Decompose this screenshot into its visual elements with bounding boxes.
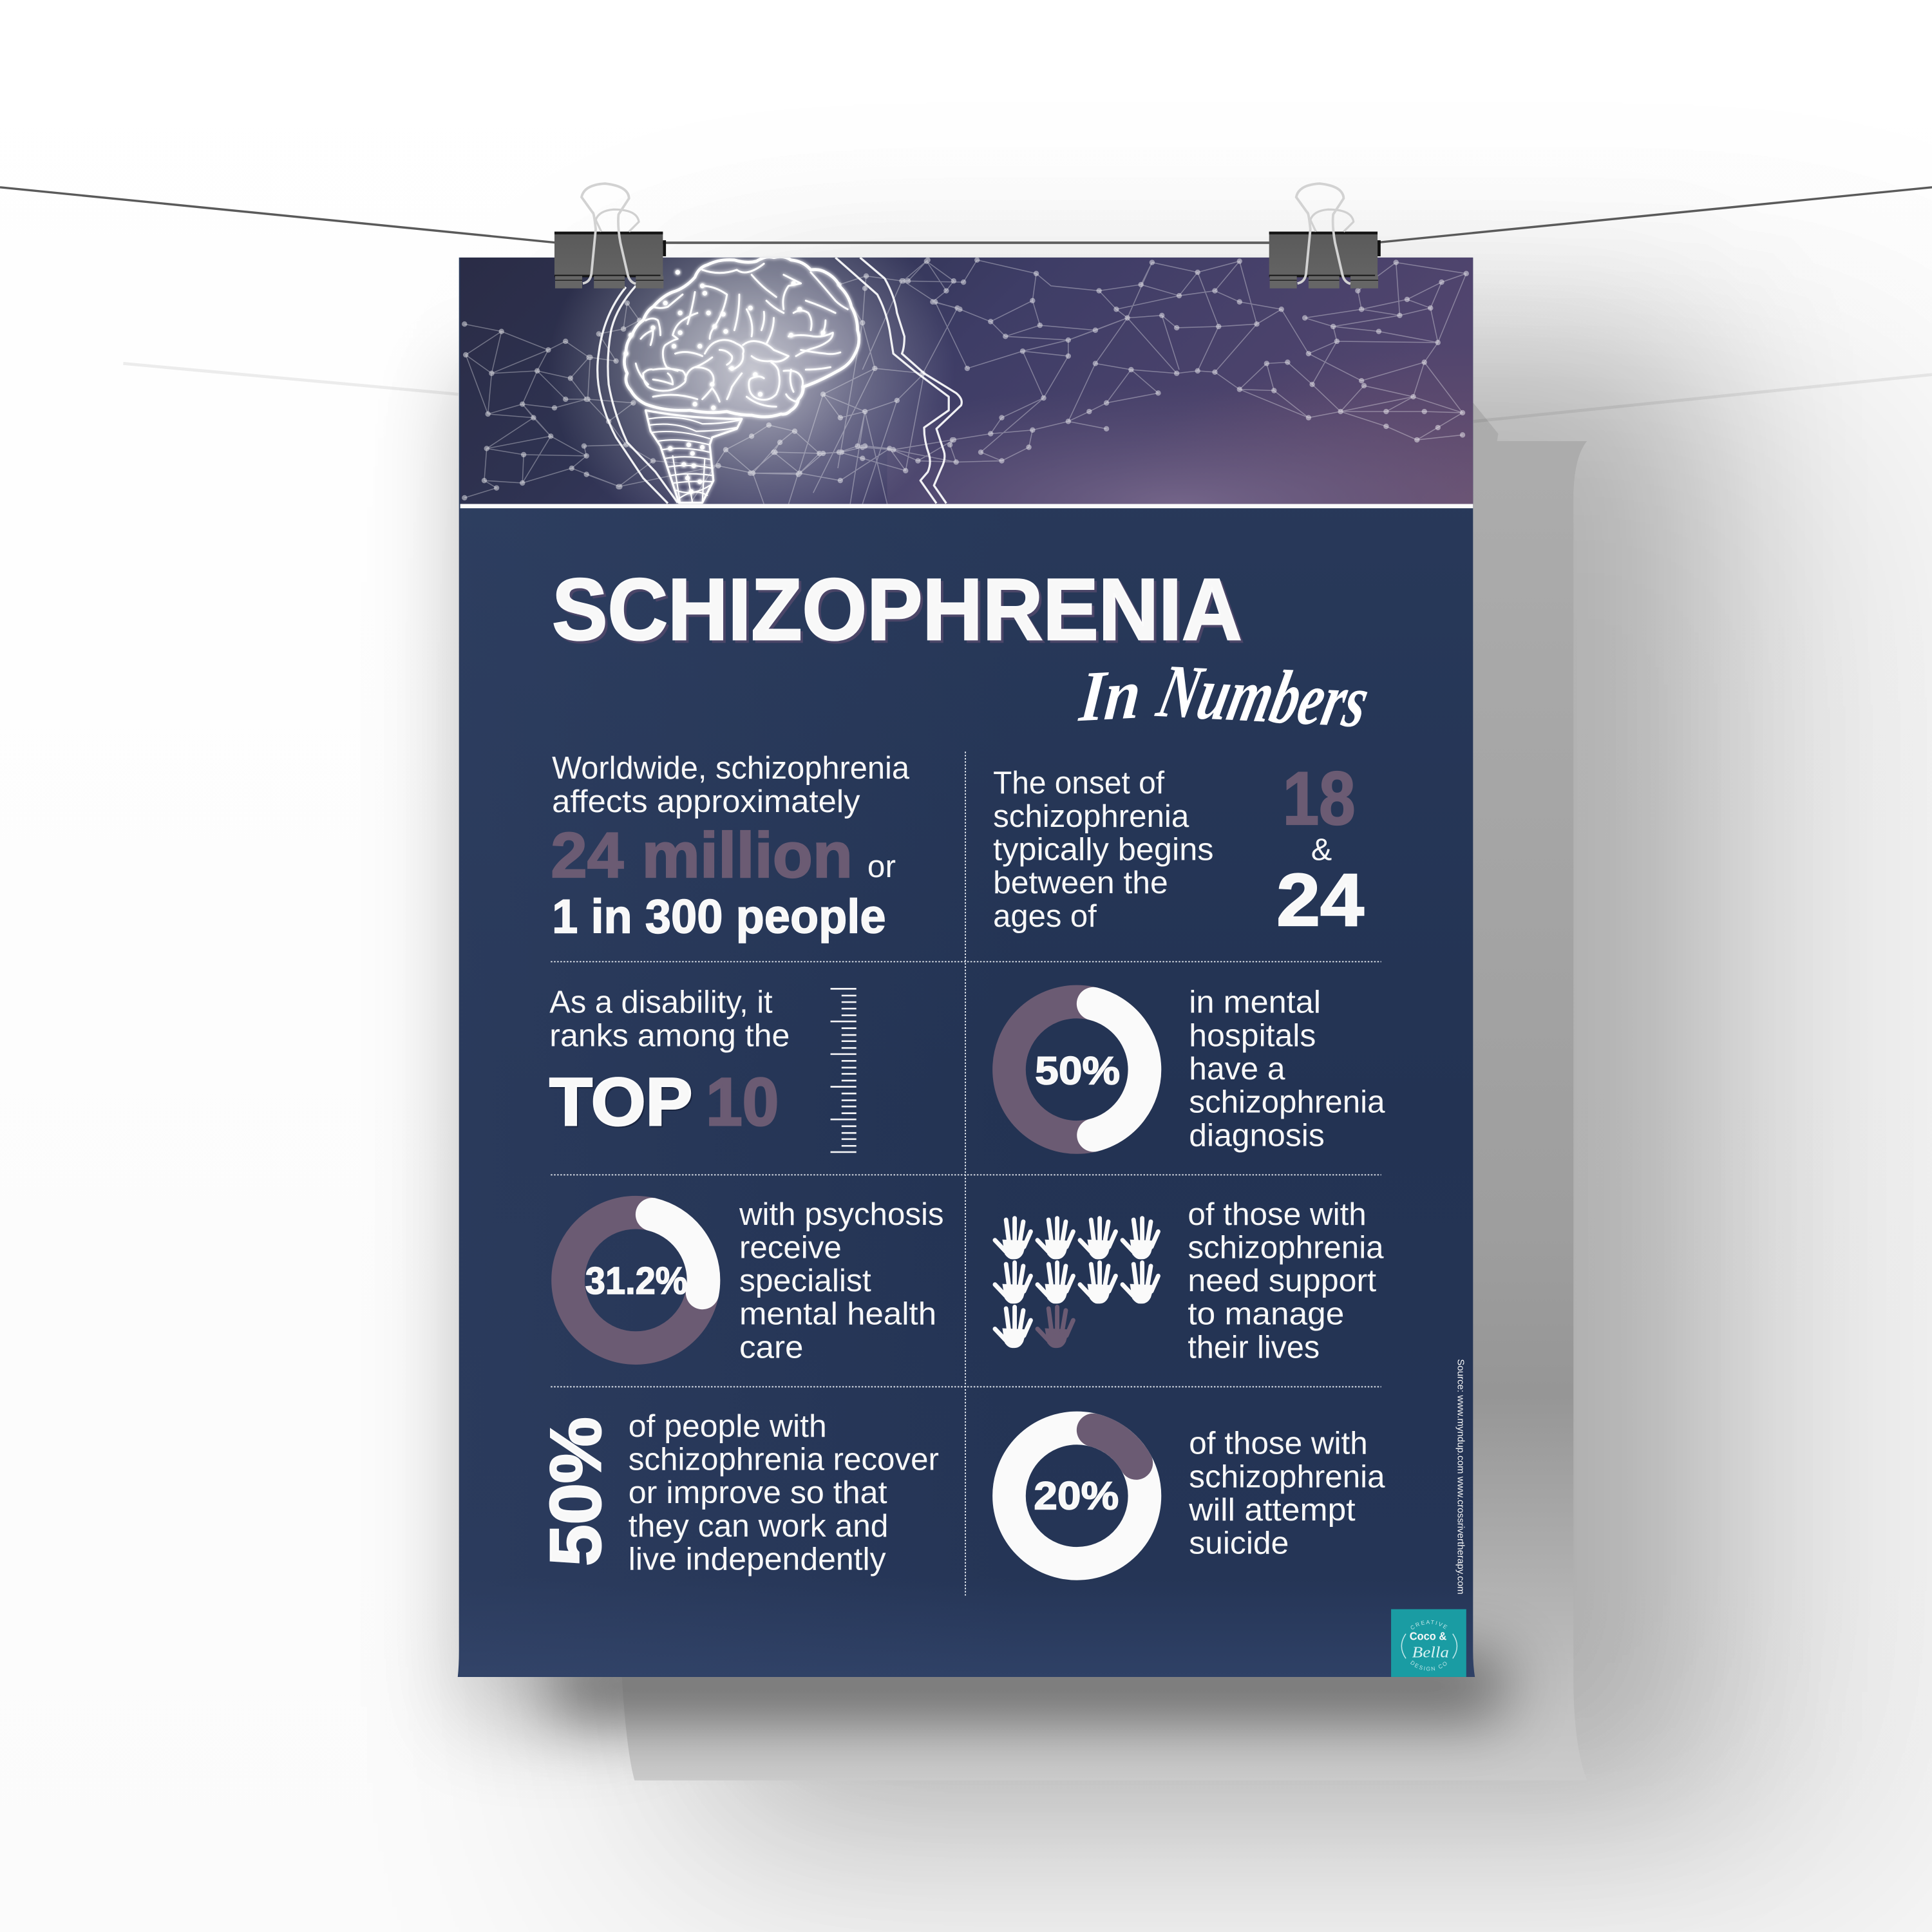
stat: onset ages xyxy=(993,756,1364,942)
stat: top 10 disability xyxy=(549,985,857,1152)
stat: top 10 disability: TOP xyxy=(549,1065,692,1140)
logo badge: CREATIVE xyxy=(1410,1620,1448,1629)
stat: 24 million: affects approximately xyxy=(552,784,860,819)
contact shadow under poster xyxy=(554,1657,1503,1716)
hand icons xyxy=(995,1218,1158,1348)
donut 50 percent xyxy=(1009,1001,1144,1137)
stat: 24 million: Worldwide, schizophrenia xyxy=(552,751,910,786)
stat: 50% recover: or improve so that xyxy=(629,1475,887,1510)
stat: 31.2% specialist care: care xyxy=(739,1330,803,1365)
stat: 50% in mental hospitals: have a xyxy=(1189,1052,1285,1086)
donut 20 percent xyxy=(1009,1428,1144,1564)
stat: 31.2% specialist care xyxy=(568,1197,944,1365)
stat: 20% attempt suicide: suicide xyxy=(1189,1526,1289,1561)
cast shadow of poster xyxy=(621,394,1587,1781)
banner lower right tint xyxy=(1109,345,1473,504)
stat: top 10 disability: As a disability, it xyxy=(549,985,773,1020)
brain fill xyxy=(626,258,858,415)
stat: 9 in 10 need support xyxy=(995,1197,1384,1365)
stat: 50% in mental hospitals: diagnosis xyxy=(1189,1118,1325,1153)
hanging wire xyxy=(0,187,1932,243)
hanging wire shadows xyxy=(123,363,1932,421)
stat: 50% recover: live independently xyxy=(629,1542,886,1577)
subtitle script: In xyxy=(1075,654,1144,737)
stat: 50% in mental hospitals: schizophrenia xyxy=(1189,1085,1385,1120)
stat: 50% in mental hospitals: 50% xyxy=(1035,1049,1120,1093)
stat: 24 million xyxy=(551,751,910,943)
stat: 50% recover: of people with xyxy=(629,1409,827,1444)
stat: onset ages: & xyxy=(1311,833,1332,867)
banner background xyxy=(460,258,1473,504)
title: SCHIZOPHRENIA xyxy=(552,560,1242,658)
banner with brain and network xyxy=(460,258,1473,504)
donut 31.2 percent xyxy=(568,1213,703,1348)
stat: 31.2% specialist care: 31.2% xyxy=(585,1259,688,1302)
stat: onset ages: ages of xyxy=(993,899,1097,934)
network lines xyxy=(464,260,1466,504)
logo badge: Coco & xyxy=(1410,1630,1446,1643)
stat: onset ages: typically begins xyxy=(993,832,1214,867)
stat: 50% in mental hospitals: in mental xyxy=(1189,985,1321,1020)
stat: 20% attempt suicide: of those with xyxy=(1189,1426,1368,1461)
white banner strip xyxy=(460,504,1473,508)
ruler icon xyxy=(831,989,857,1152)
stat: 31.2% specialist care: mental health xyxy=(739,1297,936,1332)
stat: onset ages: The onset of xyxy=(993,766,1164,800)
stat: 50% recover: they can work and xyxy=(629,1509,888,1544)
source note: Source: www.myndup.com www.crossrivertherapy.com xyxy=(1455,1359,1465,1595)
stat: top 10 disability: 10 xyxy=(706,1065,779,1140)
network nodes xyxy=(464,260,1466,498)
stat: onset ages: schizophrenia xyxy=(993,799,1189,834)
stat: 9 in 10 need support: their lives xyxy=(1188,1330,1320,1365)
stat: 50% in mental hospitals: hospitals xyxy=(1189,1018,1316,1053)
stat: 50% recover: schizophrenia recover xyxy=(629,1443,939,1477)
stat: 31.2% specialist care: specialist xyxy=(739,1264,871,1298)
stat: 20% attempt suicide xyxy=(1009,1426,1385,1564)
stat: 24 million: or xyxy=(867,849,896,884)
stat: 31.2% specialist care: receive xyxy=(739,1230,842,1265)
banner purple haze xyxy=(887,345,1473,504)
binder clip left xyxy=(554,184,666,289)
head profile outline xyxy=(598,258,961,504)
stat: onset ages: 18 xyxy=(1283,756,1356,840)
stat: 9 in 10 need support: of those with xyxy=(1188,1197,1367,1232)
logo badge: DESIGN CO xyxy=(1409,1659,1450,1672)
ambient shadow right of poster xyxy=(739,333,1700,1799)
ambient shadow left of poster xyxy=(459,370,656,1725)
subtitle script: Numbers xyxy=(1150,648,1377,743)
poster body xyxy=(458,258,1475,1677)
stat: 20% attempt suicide: schizophrenia xyxy=(1189,1459,1385,1494)
subtitle script xyxy=(1075,648,1377,743)
logo badge: Bella xyxy=(1412,1644,1449,1661)
stat: top 10 disability: ranks among the xyxy=(549,1018,790,1053)
grid dividers xyxy=(551,752,1381,1596)
stat: 31.2% specialist care: with psychosis xyxy=(739,1197,944,1232)
stat: 50% recover: 50% xyxy=(536,1417,616,1566)
stat: 9 in 10 need support: need support xyxy=(1188,1264,1377,1298)
stat: 9 in 10 need support: to manage xyxy=(1188,1297,1344,1332)
binder clip right xyxy=(1269,184,1381,289)
stat: 50% in mental hospitals xyxy=(1009,985,1385,1153)
stat: onset ages: between the xyxy=(993,866,1168,900)
brain sparkles xyxy=(626,272,823,491)
stat: 24 million: 24 million xyxy=(551,820,853,891)
poster left highlight xyxy=(460,507,1470,1676)
head and brain glow xyxy=(548,191,955,548)
stat: 20% attempt suicide: 20% xyxy=(1034,1474,1119,1518)
stat: 24 million: 1 in 300 people xyxy=(552,889,886,943)
stat: onset ages: 24 xyxy=(1276,859,1364,942)
stat: 9 in 10 need support: schizophrenia xyxy=(1188,1230,1384,1265)
stat: 50% recover xyxy=(536,1409,939,1577)
brain illustration xyxy=(624,257,859,503)
logo badge xyxy=(1391,1609,1466,1677)
wide ambient shadow xyxy=(616,357,1932,1932)
stat: 20% attempt suicide: will attempt xyxy=(1188,1493,1356,1528)
